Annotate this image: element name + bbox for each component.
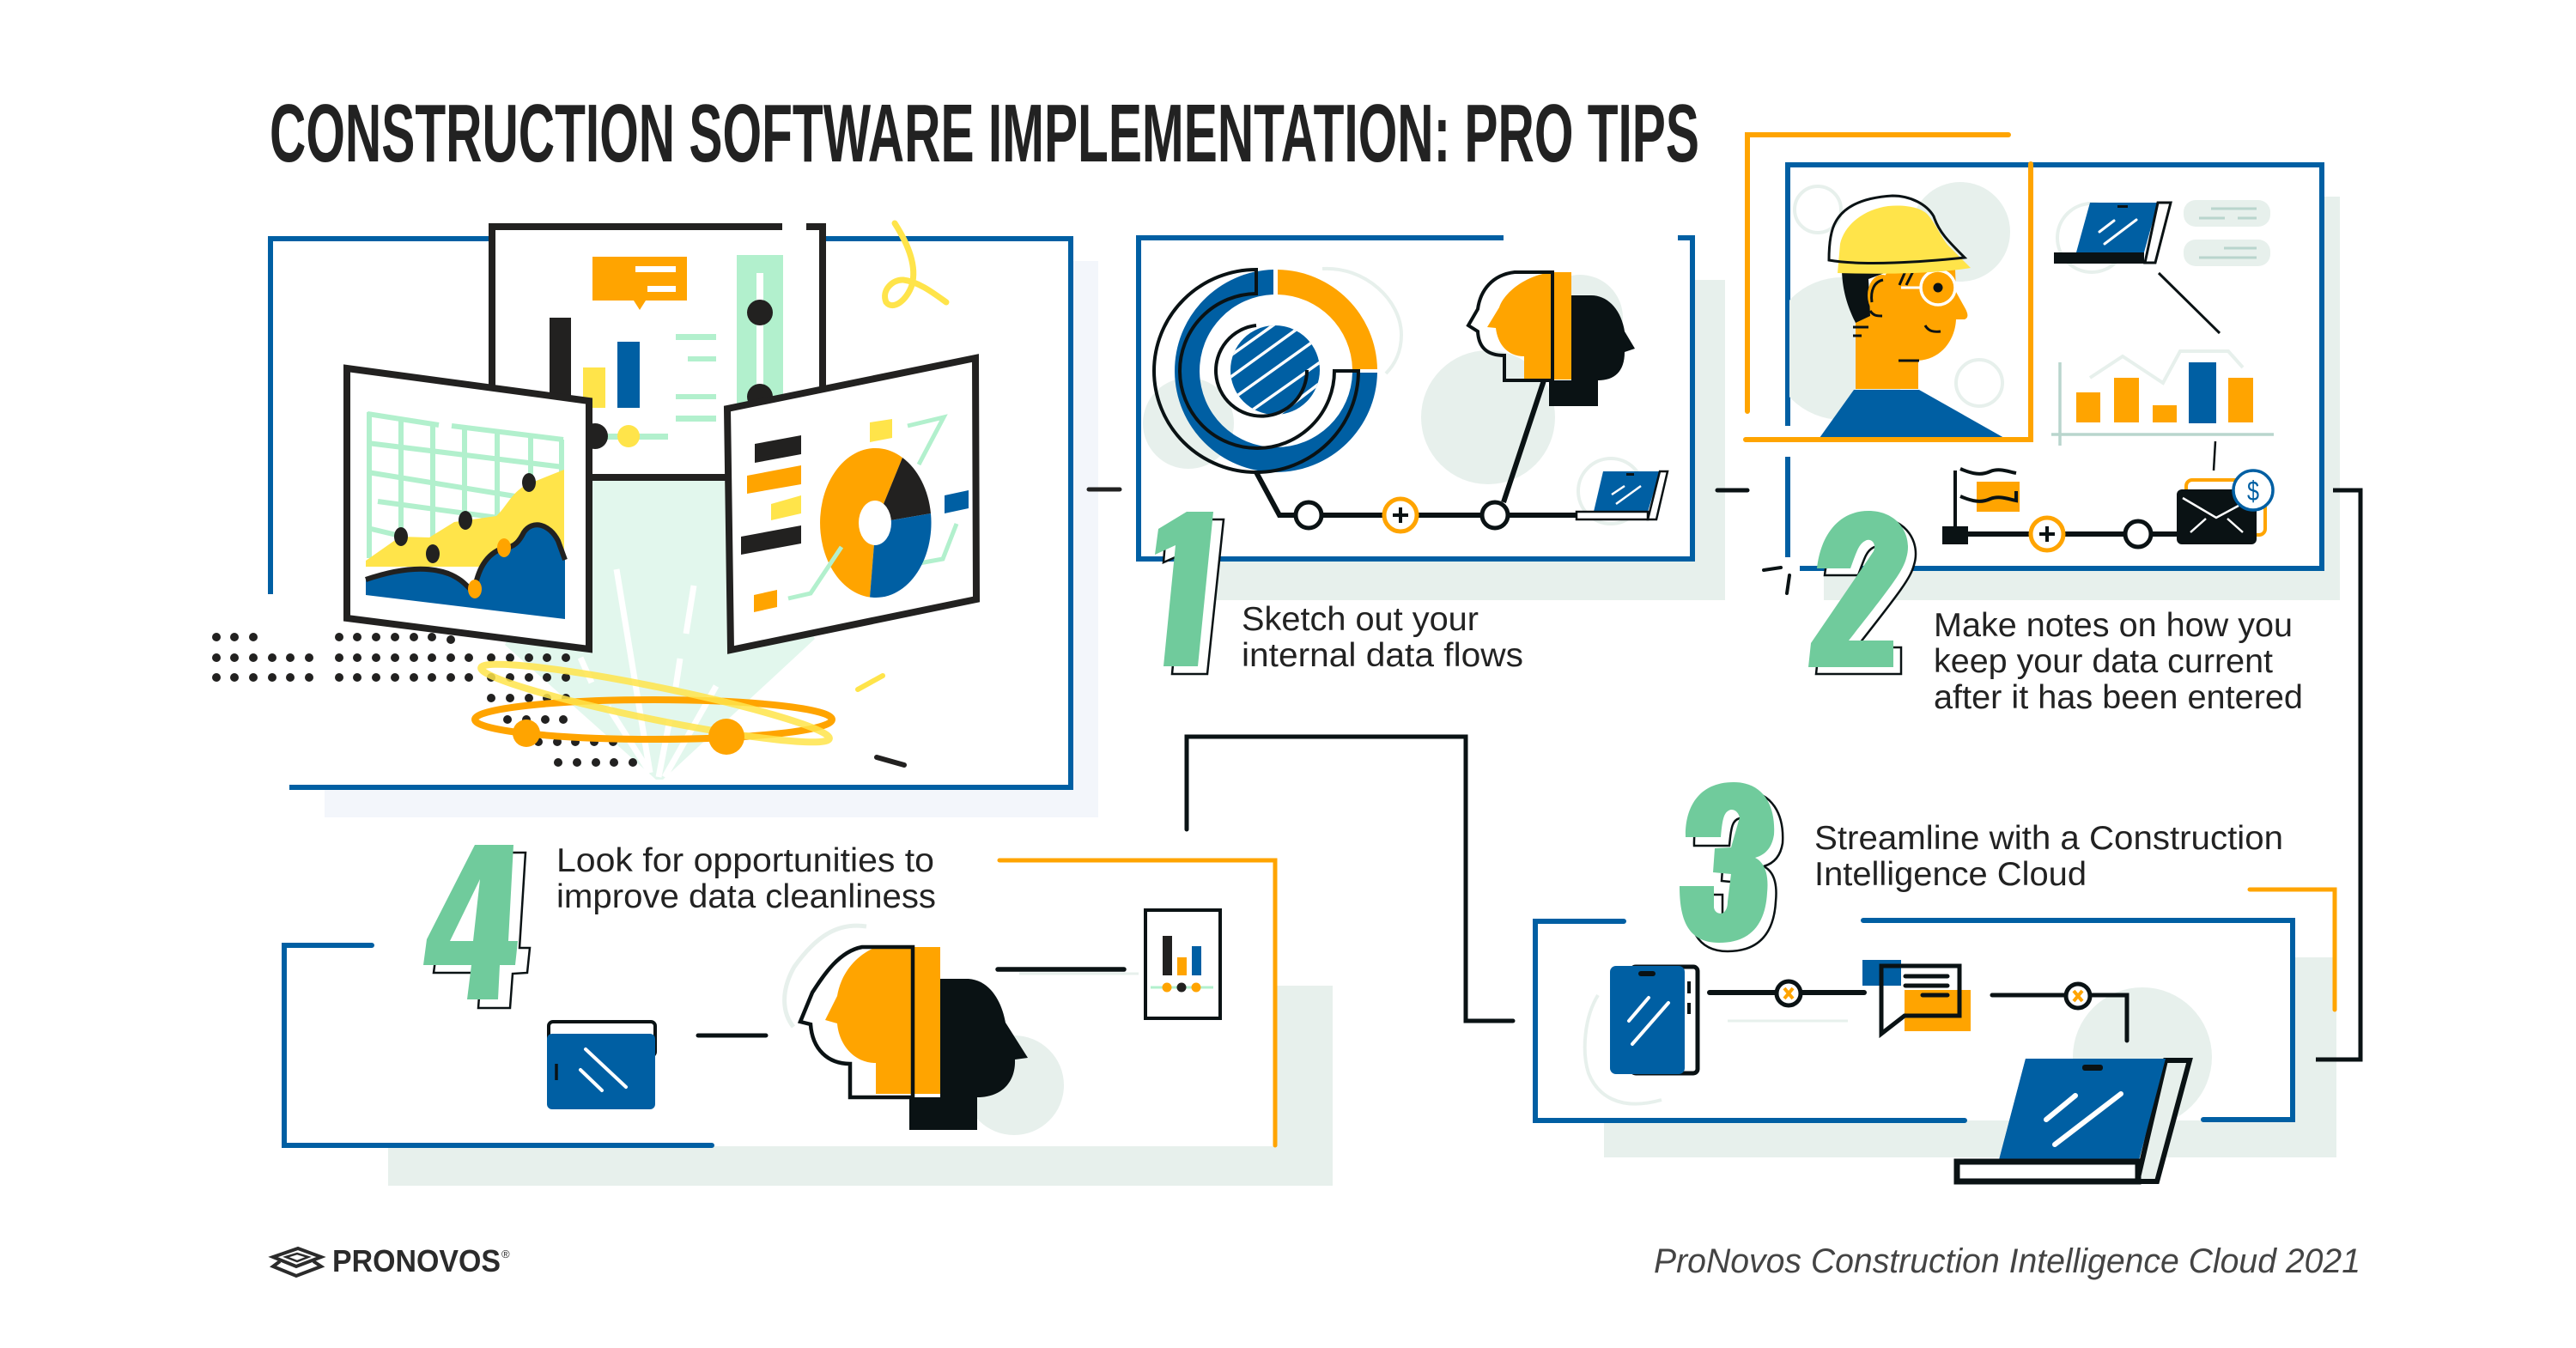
panel: step 3 bbox=[1535, 782, 2336, 1181]
left chart sheet bbox=[347, 368, 589, 649]
pale background circles bbox=[1771, 182, 2010, 420]
pale shapes bbox=[1585, 987, 2212, 1126]
light rays bbox=[580, 569, 716, 777]
step 2 text: after it has been entered bbox=[1934, 679, 2303, 716]
spark marks bbox=[1764, 568, 1789, 593]
connector dash bbox=[698, 1034, 766, 1037]
icon: envelope with dollar: $ bbox=[2247, 476, 2259, 507]
step 1 text: internal data flows bbox=[1242, 637, 1523, 674]
dot grid bbox=[212, 633, 637, 767]
icon: tablet bbox=[547, 1022, 655, 1109]
step 3 text bbox=[1814, 820, 2283, 893]
bar chart bbox=[2051, 351, 2274, 446]
diagonal connector bbox=[2159, 273, 2220, 333]
connector: step 3 to step 4 bbox=[1187, 737, 1513, 1021]
numeral 1 bbox=[1155, 512, 1224, 674]
step 2 text bbox=[1934, 607, 2303, 716]
step 3 text: Intelligence Cloud bbox=[1814, 856, 2087, 893]
icon: envelope with dollar bbox=[2177, 471, 2273, 544]
icon: small laptop bbox=[1577, 471, 1668, 519]
connector: step 2 to step 3 bbox=[2316, 490, 2360, 1060]
step 3 text: Streamline with a Construction bbox=[1814, 820, 2283, 857]
icon: chat bubble bbox=[1862, 960, 1971, 1034]
flow line with nodes bbox=[1968, 518, 2178, 550]
pale shapes bbox=[785, 926, 1064, 1135]
accent dashes bbox=[858, 676, 904, 765]
step 2 text: keep your data current bbox=[1934, 643, 2273, 680]
flow line with nodes bbox=[1256, 380, 1580, 531]
icon: two heads bbox=[800, 947, 1028, 1130]
right pie chart sheet bbox=[727, 358, 976, 650]
panel: step 1 bbox=[1139, 238, 1725, 674]
numeral 3 bbox=[1680, 782, 1783, 951]
worker portrait bbox=[1820, 270, 2004, 438]
step 4 text: improve data cleanliness bbox=[556, 878, 936, 915]
numeral 4 bbox=[423, 845, 530, 1008]
step 4 text bbox=[556, 842, 936, 915]
numeral 2 bbox=[1808, 511, 1916, 674]
connector: step 1 to step 2 bbox=[1717, 488, 1747, 493]
step 1 text: Sketch out your bbox=[1242, 601, 1479, 638]
icon: flag bbox=[1942, 469, 2020, 544]
logo: Pronovos: ® bbox=[501, 1248, 510, 1260]
panel: step 2 bbox=[1746, 135, 2340, 716]
orange corner bbox=[999, 860, 1275, 1145]
short connector bbox=[2214, 441, 2215, 471]
flow line 1 bbox=[1710, 981, 1864, 1021]
logo: Pronovos: PRONOVOS bbox=[332, 1243, 501, 1278]
yellow squiggle bbox=[885, 223, 946, 306]
icon: large laptop bbox=[1957, 1059, 2190, 1181]
step 4 text: Look for opportunities to bbox=[556, 842, 934, 879]
connector line bbox=[998, 967, 1124, 972]
panel: hero illustration bbox=[212, 223, 1098, 817]
icon: report card bbox=[1145, 910, 1220, 1018]
icon: two heads bbox=[1468, 272, 1635, 406]
icon: stacked diamonds bbox=[273, 1248, 321, 1276]
connector: hero to step 1 bbox=[1089, 488, 1120, 491]
title: CONSTRUCTION SOFTWARE IMPLEMENTATION: PRO TIPS bbox=[270, 88, 1699, 179]
connector shadow bbox=[1019, 972, 1139, 975]
step 1 text bbox=[1242, 601, 1523, 674]
message pills bbox=[2184, 200, 2270, 266]
icon: laptop bbox=[2054, 203, 2171, 272]
footer source: ProNovos Construction Intelligence Cloud 2021 bbox=[1654, 1242, 2360, 1280]
orange frame bbox=[1746, 135, 2031, 440]
step 2 text: Make notes on how you bbox=[1934, 607, 2293, 644]
panel: step 4 bbox=[283, 842, 1333, 1186]
orbit rings bbox=[475, 652, 833, 755]
projector beam bbox=[505, 481, 815, 780]
hard hat bbox=[1829, 196, 1971, 274]
pale background circles bbox=[1143, 269, 1643, 524]
icon: donut chart bbox=[1154, 270, 1377, 472]
flow line 2 bbox=[1992, 984, 2127, 1041]
icon: phone bbox=[1610, 966, 1698, 1074]
orange corner bbox=[2250, 890, 2335, 1010]
back dashboard sheet bbox=[492, 227, 823, 477]
